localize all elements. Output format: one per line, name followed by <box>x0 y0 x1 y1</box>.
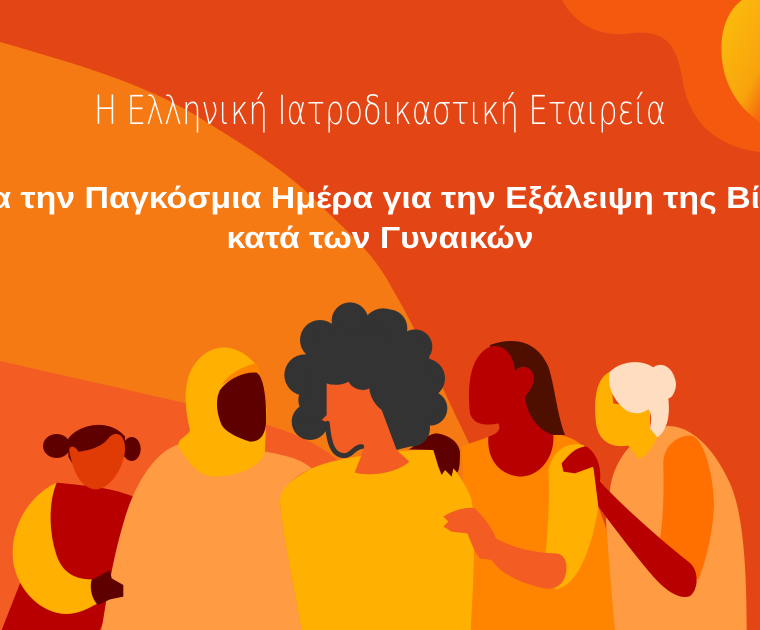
head and neck <box>469 346 553 477</box>
curly hair <box>284 302 447 450</box>
elderly face <box>595 372 657 459</box>
dark hand on shoulder <box>408 433 460 477</box>
figure: woman with brown hair <box>462 341 615 630</box>
skin arm with hand <box>443 508 567 589</box>
yellow sleeve <box>546 444 598 589</box>
figure: woman in hijab <box>91 347 312 630</box>
girl face <box>69 434 125 489</box>
curly hair woman body <box>280 449 474 630</box>
hair <box>490 341 565 435</box>
figure: girl <box>2 425 141 630</box>
darker panel <box>660 436 714 580</box>
girl yellow arm <box>13 483 97 614</box>
hijab orange strip <box>222 363 261 385</box>
red arm <box>562 447 697 597</box>
heading line two: κατά των Γυναικών <box>226 220 534 255</box>
figure: elderly woman <box>562 362 747 630</box>
blob: top right orange <box>562 0 760 152</box>
hijab woman face <box>217 373 266 442</box>
hijab woman body <box>102 445 312 630</box>
main heading <box>0 180 760 255</box>
white hair <box>609 362 676 437</box>
girl hair <box>43 425 141 472</box>
blob: lower left red-orange <box>0 361 340 630</box>
hijab <box>178 347 267 477</box>
face and neck <box>322 382 409 474</box>
chin strap curl <box>327 423 362 456</box>
figure: woman with curly hair <box>280 302 474 630</box>
elderly woman body <box>606 426 747 630</box>
girl hand <box>91 570 123 605</box>
blob: top right yellow <box>721 0 760 122</box>
blob: large orange <box>0 42 470 630</box>
girl body <box>2 483 140 630</box>
brown hair woman body <box>462 434 615 630</box>
